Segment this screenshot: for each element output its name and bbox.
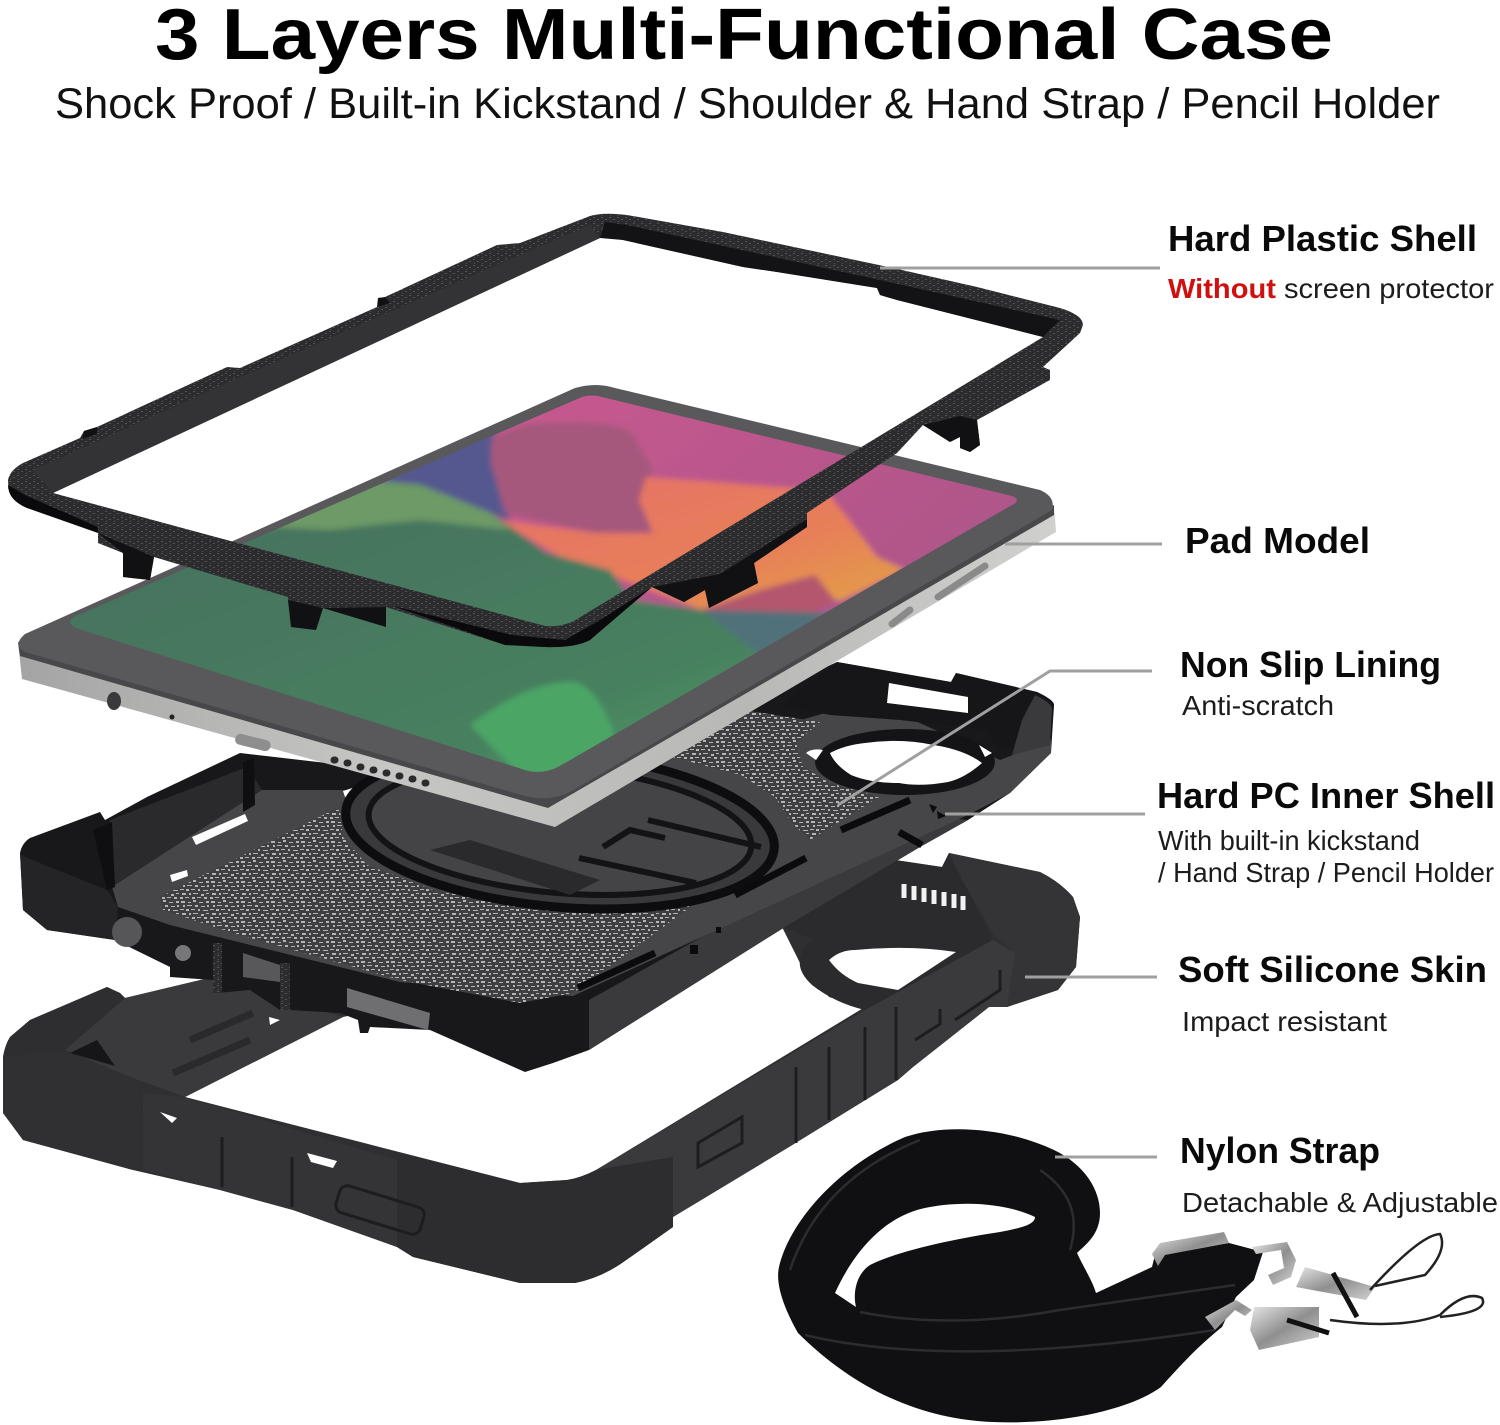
shell: right side wall	[589, 815, 968, 1050]
skin: bottom band	[143, 1093, 397, 1247]
strap: metal clips	[1205, 1242, 1375, 1350]
label: hard pc inner shell: / Hand Strap / Pencil Holder	[1158, 857, 1494, 888]
label: hard pc inner shell: With built-in kickstand	[1158, 825, 1420, 856]
subtitle: Shock Proof / Built-in Kickstand / Shoulder & Hand Strap / Pencil Holder	[55, 80, 1440, 128]
frame: lower clips	[82, 297, 980, 630]
label: pad model: Pad Model	[1185, 520, 1370, 561]
tablet: black glass	[18, 385, 1053, 798]
tablet: jack and speaker details	[107, 566, 985, 783]
label: hard pc inner shell	[1157, 775, 1495, 888]
label: non slip lining	[1180, 644, 1441, 721]
skin: speaker grille	[904, 884, 963, 910]
tablet: silver body	[18, 505, 1056, 827]
frame: main body with hole	[8, 214, 1083, 647]
label: soft silicone skin: Impact resistant	[1182, 1006, 1387, 1037]
label: non slip lining: Non Slip Lining	[1180, 644, 1441, 685]
screen: orange area	[498, 477, 905, 610]
label: soft silicone skin: Soft Silicone Skin	[1178, 949, 1487, 990]
strap: loop opening	[835, 1204, 1035, 1307]
strap: cord loops	[1330, 1234, 1483, 1324]
hard PC inner shell layer	[20, 662, 1054, 1072]
strap: metal buckle	[1152, 1232, 1229, 1266]
hard plastic shell frame	[8, 214, 1083, 647]
skin: left interior	[65, 977, 343, 1097]
label: hard plastic shell: Without screen protector	[1168, 273, 1494, 304]
screen: green area	[70, 514, 764, 768]
label: hard plastic shell: Hard Plastic Shell	[1168, 218, 1477, 259]
label: nylon strap: Nylon Strap	[1180, 1130, 1380, 1171]
frame: top-left inner wall	[33, 225, 600, 493]
frame: bottom black wall	[8, 485, 652, 647]
frame: top-right inner wall	[600, 222, 1060, 337]
skin: bottom corner block	[397, 1155, 673, 1283]
screen: lilac area	[703, 574, 836, 614]
skin: white centre opening	[185, 927, 865, 1183]
label: hard pc inner shell: Hard PC Inner Shell	[1157, 775, 1495, 816]
shell: kickstand ring	[339, 735, 781, 925]
label: hard plastic shell	[1168, 218, 1494, 304]
nylon strap	[778, 1129, 1483, 1422]
shell: left back wall	[110, 767, 262, 885]
shell: camera cutout	[806, 729, 995, 795]
skin: right corner block	[949, 853, 1080, 1007]
shell: white slots	[170, 784, 366, 882]
shell: floor	[112, 700, 1051, 996]
shell: left rim	[20, 853, 118, 940]
label: soft silicone skin	[1178, 949, 1487, 1037]
shell: side slots and holes	[578, 800, 946, 988]
leader lines	[838, 268, 1162, 1157]
skin: back right interior and camera ring	[782, 853, 993, 1010]
shell: bottom edge cutouts	[112, 917, 430, 1030]
skin: right band	[596, 940, 1015, 1217]
skin: left corner block	[3, 1050, 143, 1170]
pad model tablet	[18, 380, 1056, 827]
label: non slip lining: Anti-scratch	[1182, 690, 1334, 721]
skin: button and grooves	[222, 970, 1000, 1236]
screen: mauve blob	[491, 422, 653, 533]
shell: non slip lining upper	[672, 710, 879, 840]
screen: purple area	[381, 434, 512, 522]
label: nylon strap: Detachable & Adjustable	[1182, 1187, 1498, 1218]
shell: non slip lining lower	[160, 810, 696, 1003]
tablet: screen	[70, 396, 1017, 772]
label: nylon strap	[1180, 1130, 1498, 1218]
shell: back wall	[780, 662, 1054, 750]
soft silicone skin layer	[3, 853, 1080, 1283]
strap: fold highlights	[790, 1140, 1235, 1351]
